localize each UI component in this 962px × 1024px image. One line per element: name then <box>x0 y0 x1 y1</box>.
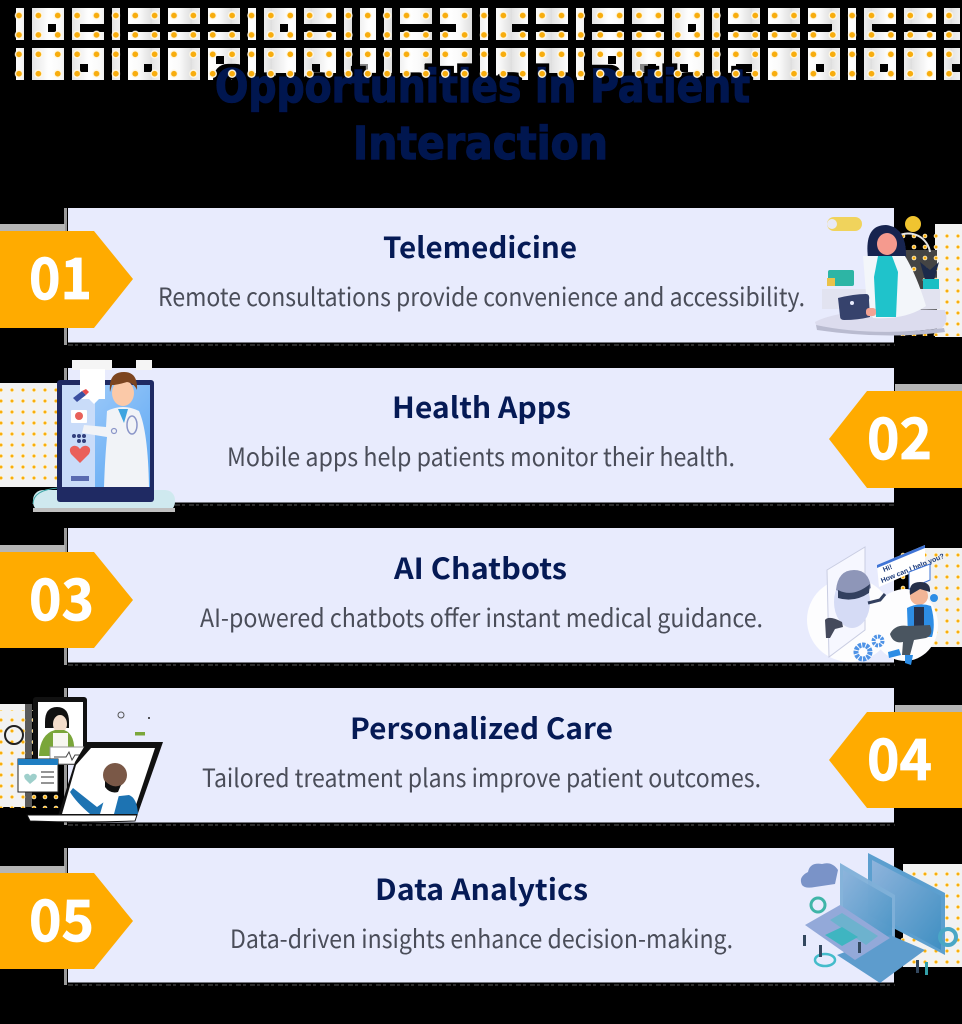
banner dots <box>10 8 960 80</box>
icon: health app doctor on tablet <box>33 360 175 512</box>
number tag 02: 02 <box>867 394 932 476</box>
number tag 04 <box>829 705 962 808</box>
dotted backdrop: item 1 <box>895 224 962 337</box>
dotted backdrop: item 5 <box>895 864 962 968</box>
number tag 02 <box>829 384 962 488</box>
title: Interaction <box>353 117 608 170</box>
dotted backdrop: item 2 <box>0 383 60 487</box>
icon: AI chatbot and user <box>807 545 946 665</box>
icon: telemedicine doctor at desk <box>815 216 946 336</box>
dotted backdrop: item 4 <box>0 704 60 808</box>
icon: AI chatbot and user: Hi! <box>882 564 893 574</box>
number tag 03 <box>0 545 133 648</box>
heading: Personalized Care: Personalized Care <box>350 706 613 748</box>
panel: AI Chatbots <box>64 528 895 665</box>
icon: data analytics laptop <box>801 853 956 983</box>
panel: Health Apps <box>64 368 895 505</box>
title: Opportunities in Patient <box>215 60 750 113</box>
heading: Data Analytics: Data Analytics <box>375 867 588 909</box>
heading: Health Apps: Health Apps <box>392 385 571 427</box>
title <box>215 60 750 170</box>
heading: Telemedicine: Telemedicine <box>383 225 577 267</box>
number tag 01: 01 <box>29 234 92 316</box>
description: Health Apps: Mobile apps help patients monitor their health. <box>227 438 735 474</box>
number tag 05: 05 <box>29 876 94 958</box>
icon: video consultation on laptop <box>5 697 163 822</box>
panel: Personalized Care <box>64 688 895 825</box>
description: Telemedicine: Remote consultations provide convenience and accessibility. <box>158 278 805 314</box>
description: AI Chatbots: AI-powered chatbots offer instant medical guidance. <box>200 599 763 635</box>
description: Personalized Care: Tailored treatment plans improve patient outcomes. <box>202 759 761 795</box>
panel: Data Analytics <box>64 848 895 985</box>
panel: Telemedicine <box>64 208 895 345</box>
number tag 04: 04 <box>867 715 932 797</box>
heading: AI Chatbots: AI Chatbots <box>393 546 567 588</box>
description: Data Analytics: Data-driven insights enhance decision-making. <box>230 920 733 956</box>
decorative dotted banner <box>16 8 960 80</box>
number tag 01 <box>0 224 133 328</box>
dotted backdrop: item 3 <box>895 548 962 647</box>
icon: AI chatbot and user: How can I help you? <box>880 553 946 585</box>
number tag 03: 03 <box>29 555 94 637</box>
number tag 05 <box>0 866 133 969</box>
